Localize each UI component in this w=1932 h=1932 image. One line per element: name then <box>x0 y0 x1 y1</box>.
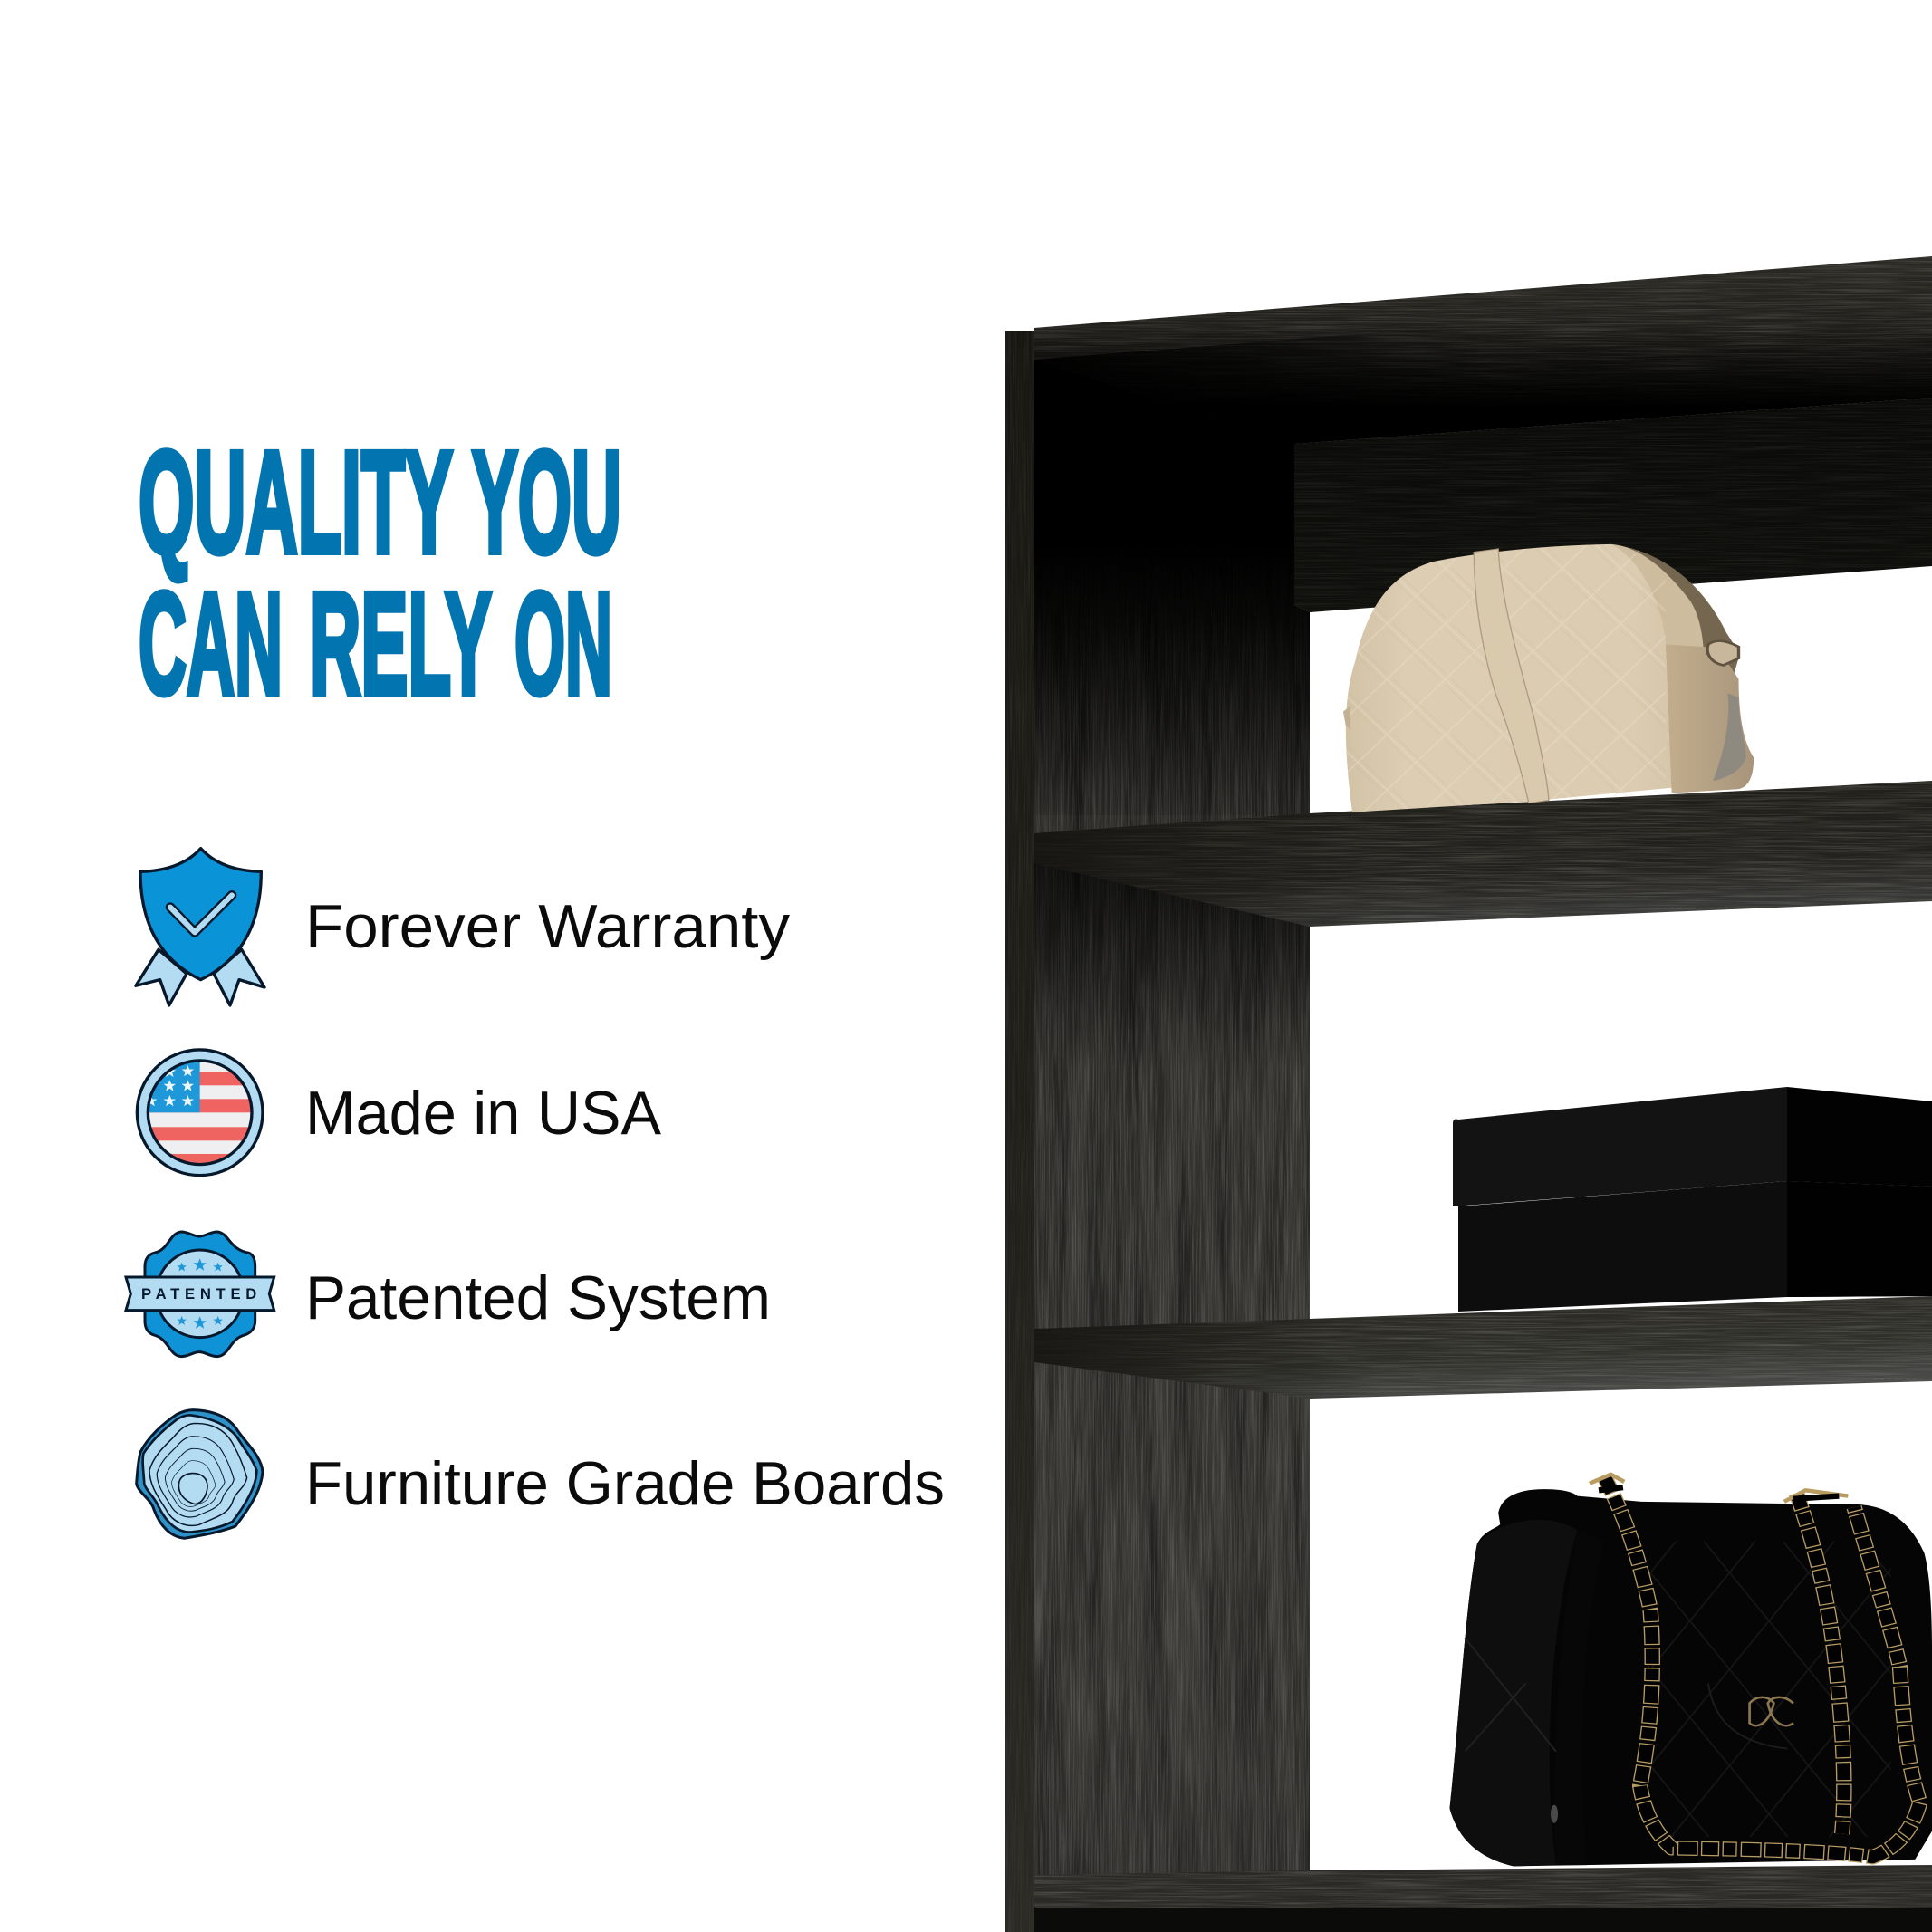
icon: USA flag circle <box>137 1050 263 1176</box>
base shadow <box>1034 1908 1932 1932</box>
top board <box>1034 256 1932 447</box>
icon: shield with ribbon <box>136 849 264 1005</box>
shelf 1 <box>1034 779 1932 928</box>
text: YOU <box>472 420 621 583</box>
text: Made in USA: Made in USA <box>305 1079 662 1148</box>
icon: patented badge <box>126 1232 274 1357</box>
icon: wood rings <box>137 1410 263 1538</box>
beige handbag <box>1343 541 1754 818</box>
title: RELY <box>310 562 492 725</box>
back board <box>1294 398 1932 615</box>
panel: shelving unit <box>1005 256 1932 1932</box>
shelf 2 <box>1034 1295 1932 1400</box>
shelf 3 <box>1034 1865 1932 1908</box>
icon: patented badge: PATENTED <box>141 1285 256 1302</box>
text: Patented System: Patented System <box>305 1264 771 1332</box>
text: ON <box>514 562 612 725</box>
title: QUALITY <box>139 420 453 583</box>
black box <box>1453 1087 1932 1312</box>
chain: gold links <box>1605 1478 1920 1857</box>
title <box>139 420 621 725</box>
title: CAN <box>139 562 283 725</box>
side panel <box>1034 360 1310 1881</box>
left edge band <box>1005 331 1034 1932</box>
text: Furniture Grade Boards: Furniture Grade Boards <box>305 1449 945 1518</box>
black quilted handbag with chain <box>1449 1475 1932 1866</box>
text: Forever Warranty: Forever Warranty <box>305 892 790 961</box>
